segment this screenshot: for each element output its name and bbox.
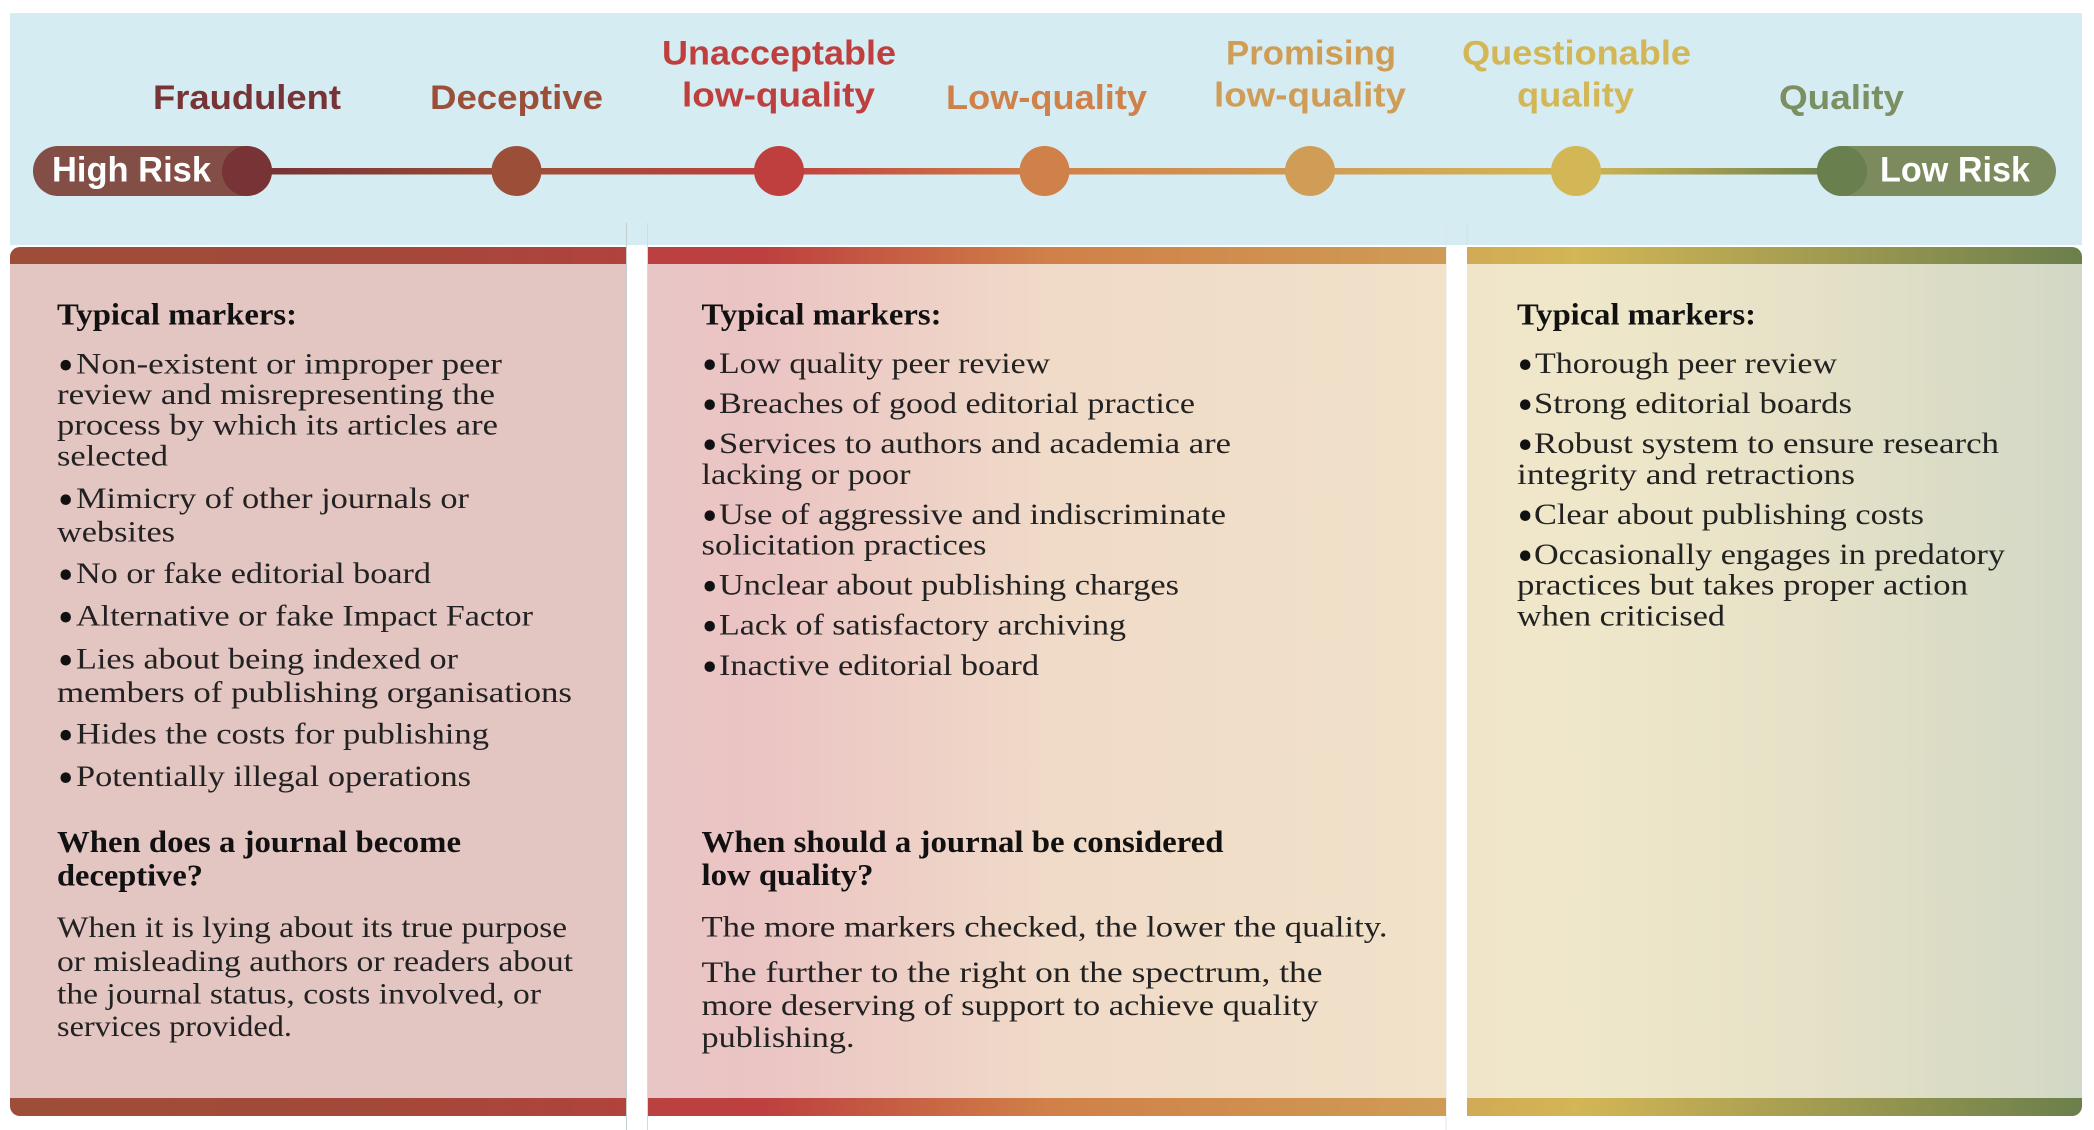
heading: when deceptive: [57, 824, 461, 892]
label: promising low-quality: Promising: [1226, 34, 1396, 72]
text: when deceptive answer: the journal status, costs involved, or: [57, 978, 541, 1010]
list: quality markers: •: [1518, 532, 1533, 580]
list: deceptive markers: •: [58, 636, 73, 685]
label: questionable quality: Questionable: [1462, 34, 1691, 72]
list: deceptive markers: No or fake editorial board: [76, 557, 431, 590]
list: deceptive markers: Mimicry of other journals or: [76, 482, 469, 515]
list: deceptive markers: websites: [57, 515, 175, 548]
heading: when low quality: When should a journal be considered: [702, 824, 1224, 859]
label: unacceptable low-quality: Unacceptable: [662, 34, 896, 72]
heading: when deceptive: When does a journal become: [57, 824, 461, 859]
list: deceptive markers: Alternative or fake Impact Factor: [76, 600, 533, 633]
list: low quality markers: Lack of satisfactory archiving: [719, 609, 1126, 642]
list: low quality markers: •: [702, 562, 717, 611]
heading: typical markers: Typical markers:: [702, 296, 942, 332]
spectrum line: [270, 168, 1820, 174]
list: low quality markers: Low quality peer review: [719, 347, 1050, 380]
list: quality markers: Clear about publishing costs: [1534, 498, 1924, 531]
list: quality markers: [1517, 340, 2005, 632]
high risk pill: High Risk: [52, 150, 212, 190]
panel: low quality markers: [648, 247, 1446, 1116]
list: low quality markers: lacking or poor: [702, 458, 911, 491]
list: low quality markers: solicitation practices: [702, 529, 986, 562]
list: quality markers: •: [1518, 420, 1533, 470]
list: low quality markers: Inactive editorial board: [719, 649, 1039, 682]
label: fraudulent: Fraudulent: [153, 79, 341, 117]
list: deceptive markers: Lies about being indexed or: [76, 642, 458, 675]
marker: deceptive: [492, 146, 542, 196]
heading: when low quality: low quality?: [702, 857, 874, 892]
list: deceptive markers: •: [58, 593, 73, 642]
heading: when deceptive: deceptive?: [57, 858, 203, 892]
list: quality markers: integrity and retractions: [1517, 458, 1855, 491]
marker: unacceptable low-quality: [754, 146, 804, 196]
label: unacceptable low-quality: [662, 34, 896, 114]
list: low quality markers: Services to authors and academia are: [719, 427, 1231, 460]
heading: when low quality: [702, 824, 1224, 892]
list: deceptive markers: members of publishing organisations: [57, 676, 572, 709]
low risk pill: [1817, 146, 2056, 196]
list: low quality markers: •: [702, 642, 717, 691]
list: quality markers: Robust system to ensure research: [1534, 427, 1999, 460]
low risk pill: Low Risk: [1880, 150, 2031, 190]
list: quality markers: •: [1518, 380, 1533, 430]
label: questionable quality: [1462, 34, 1691, 114]
marker: low-quality: [1020, 146, 1070, 196]
label: deceptive: Deceptive: [430, 79, 603, 117]
list: quality markers: Thorough peer review: [1535, 347, 1837, 380]
list: deceptive markers: Potentially illegal operations: [76, 760, 471, 793]
text: when low quality answer: [702, 910, 1388, 1054]
text: when deceptive answer: When it is lying about its true purpose: [57, 911, 567, 944]
list: quality markers: Occasionally engages in predatory: [1534, 538, 2005, 571]
list: low quality markers: Breaches of good editorial practice: [719, 387, 1195, 420]
text: when low quality answer: publishing.: [702, 1021, 854, 1054]
label: quality: Quality: [1779, 79, 1904, 117]
label: unacceptable low-quality: low-quality: [682, 76, 875, 114]
list: deceptive markers: [57, 341, 572, 802]
list: low quality markers: •: [702, 380, 717, 430]
text: when low quality answer: The further to the right on the spectrum, the: [702, 956, 1322, 989]
list: low quality markers: Use of aggressive and indiscriminate: [719, 498, 1226, 531]
label: promising low-quality: low-quality: [1214, 76, 1406, 114]
list: deceptive markers: selected: [57, 439, 168, 472]
text: when low quality answer: more deserving of support to achieve quality: [702, 989, 1318, 1022]
marker: promising low-quality: [1285, 146, 1335, 196]
marker: questionable quality: [1551, 146, 1601, 196]
list: deceptive markers: Non-existent or improper peer: [76, 347, 502, 380]
list: deceptive markers: •: [58, 550, 73, 599]
list: low quality markers: •: [702, 602, 717, 651]
list: low quality markers: Unclear about publishing charges: [719, 569, 1179, 602]
heading: typical markers: Typical markers:: [1517, 296, 1756, 332]
label: promising low-quality: [1214, 34, 1406, 114]
list: quality markers: •: [1518, 340, 1533, 390]
text: when deceptive answer: or misleading authors or readers about: [57, 945, 574, 978]
list: quality markers: •: [1518, 492, 1533, 540]
list: quality markers: when criticised: [1517, 599, 1725, 632]
list: low quality markers: •: [702, 492, 717, 540]
label: low-quality: Low-quality: [946, 79, 1147, 117]
list: deceptive markers: •: [58, 711, 73, 760]
panel: deceptive markers: [10, 247, 626, 1116]
list: quality markers: Strong editorial boards: [1534, 387, 1852, 420]
list: low quality markers: •: [702, 420, 717, 470]
panel: risk spectrum header: [10, 13, 2082, 245]
text: when deceptive answer: services provided.: [57, 1010, 292, 1043]
list: quality markers: practices but takes proper action: [1517, 569, 1968, 602]
text: when low quality answer: The more markers checked, the lower the quality.: [702, 910, 1388, 944]
label: questionable quality: quality: [1517, 76, 1634, 114]
list: low quality markers: •: [702, 340, 717, 390]
list: deceptive markers: •: [58, 753, 73, 802]
high risk pill: [33, 146, 272, 196]
list: deceptive markers: review and misrepresenting the: [57, 378, 495, 411]
heading: typical markers: Typical markers:: [57, 296, 297, 332]
list: deceptive markers: Hides the costs for publishing: [76, 717, 489, 750]
list: deceptive markers: process by which its articles are: [57, 409, 498, 442]
text: when deceptive answer: [57, 911, 574, 1043]
list: deceptive markers: •: [58, 341, 73, 390]
list: low quality markers: [702, 340, 1231, 691]
list: deceptive markers: •: [58, 476, 73, 525]
panel: quality markers: [1467, 247, 2082, 1116]
